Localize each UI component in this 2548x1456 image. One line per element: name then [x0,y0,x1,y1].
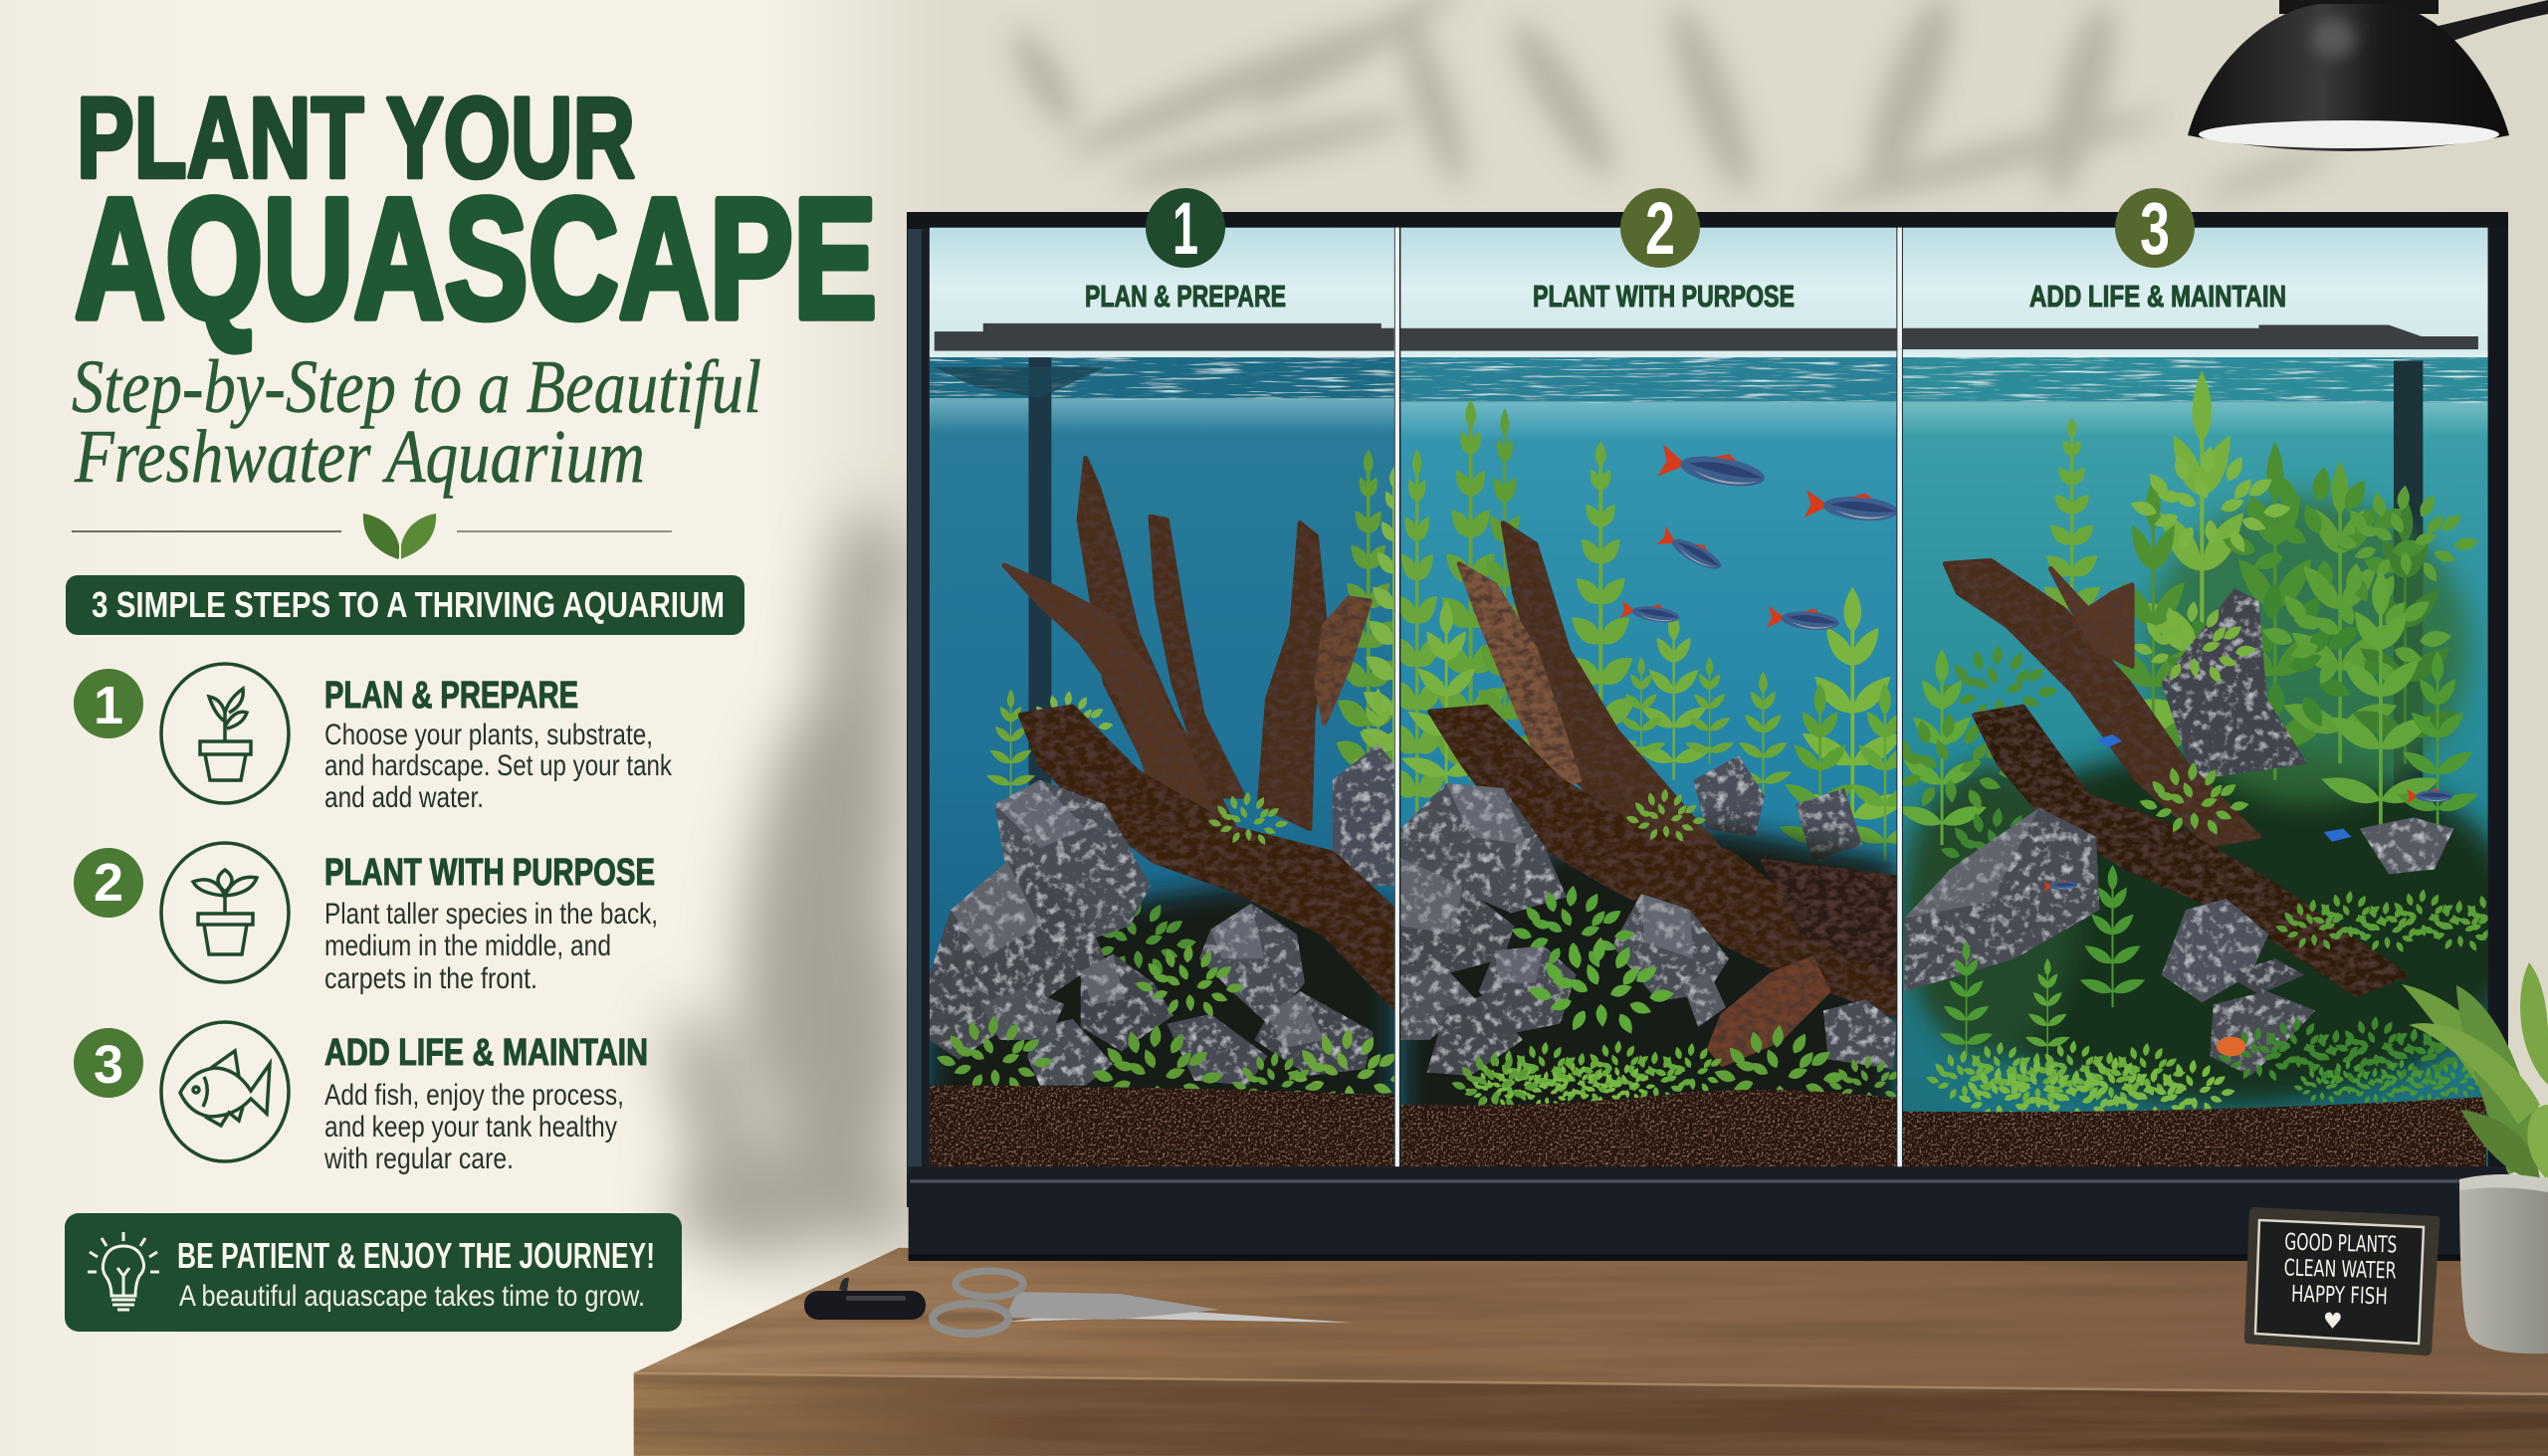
number badge 3 [74,1028,143,1098]
step badge 2 [1620,187,1700,270]
title [75,75,877,354]
title: AQUASCAPE [75,163,877,354]
body 1 [324,719,673,814]
tank base [909,1166,2509,1261]
fish school [1619,442,1899,634]
leaf divider [72,514,672,560]
subtitle: Freshwater Aquarium [74,415,645,499]
sign text: GOOD PLANTS [2284,1229,2398,1259]
body 3: Add fish, enjoy the process, [324,1079,624,1112]
sign text: HAPPY FISH [2291,1282,2388,1310]
tank label 2: PLANT WITH PURPOSE [1533,279,1795,313]
icon: light bulb [88,1232,159,1310]
step 3 [74,1022,648,1175]
subtitle [72,345,761,499]
panel 2: plant with purpose [1400,227,1897,1166]
number badge 3: 3 [94,1035,123,1095]
step 1 [74,664,673,814]
body 2: medium in the middle, and [324,930,611,962]
wall plant shadows [1002,0,2339,216]
panel 1: plan and prepare [927,228,1430,1170]
tool: black magnet cleaner [804,1278,926,1320]
wooden table [634,1248,2548,1456]
section banner [66,575,744,635]
number badge 1: 1 [94,676,123,735]
tank frame [907,212,2508,1207]
lamp [2188,0,2548,151]
title: PLANT YOUR [77,75,635,202]
body 3: and keep your tank healthy [324,1111,617,1144]
number badge 1 [74,669,143,738]
body 1: and add water. [324,781,484,814]
heading 3: ADD LIFE & MAINTAIN [324,1032,648,1074]
subtitle: Step-by-Step to a Beautiful [72,345,761,429]
aquarium scene [909,228,2536,1261]
tank dividers [1395,228,1902,1170]
step badge 3: 3 [2140,187,2170,270]
step badge 1: 1 [1172,187,1198,270]
section banner: 3 SIMPLE STEPS TO A THRIVING AQUARIUM [92,584,725,625]
step badge 3 [2115,187,2195,270]
chalkboard sign [2244,1207,2440,1355]
tank label 1: PLAN & PREPARE [1085,279,1286,313]
body 1: and hardscape. Set up your tank [324,749,673,782]
wall shadow beside left panel [651,497,921,1259]
heading 1: PLAN & PREPARE [324,675,578,717]
tool: aquascaping scissors [933,1271,1353,1334]
panel 3: add life and maintain [1903,227,2488,1166]
step 2 [74,843,658,995]
sign text [2282,1229,2398,1337]
body 2: carpets in the front. [324,962,537,995]
sign text: CLEAN WATER [2283,1255,2397,1285]
heading 2: PLANT WITH PURPOSE [324,852,655,894]
body 2 [324,898,658,995]
panel: aquarium tank [907,187,2536,1261]
body 1: Choose your plants, substrate, [324,719,653,751]
step badge 2: 2 [1645,187,1675,270]
sign text: ♥ [2322,1310,2343,1335]
body 3 [323,1079,624,1175]
desk plant in pot [2402,962,2548,1353]
icon: potted plant [161,843,289,982]
callout: be patient: BE PATIENT & ENJOY THE JOURNEY! [177,1235,655,1276]
step badge 1 [1146,187,1225,270]
body 3: with regular care. [323,1143,514,1175]
callout: be patient [65,1213,682,1332]
callout: be patient: A beautiful aquascape takes time to grow. [179,1280,645,1313]
number badge 2: 2 [94,853,123,913]
number badge 2 [74,848,143,918]
tank label 3: ADD LIFE & MAINTAIN [2029,279,2286,313]
icon: potted sprout [161,664,289,803]
body 2: Plant taller species in the back, [324,898,658,931]
icon: fish [161,1022,289,1161]
